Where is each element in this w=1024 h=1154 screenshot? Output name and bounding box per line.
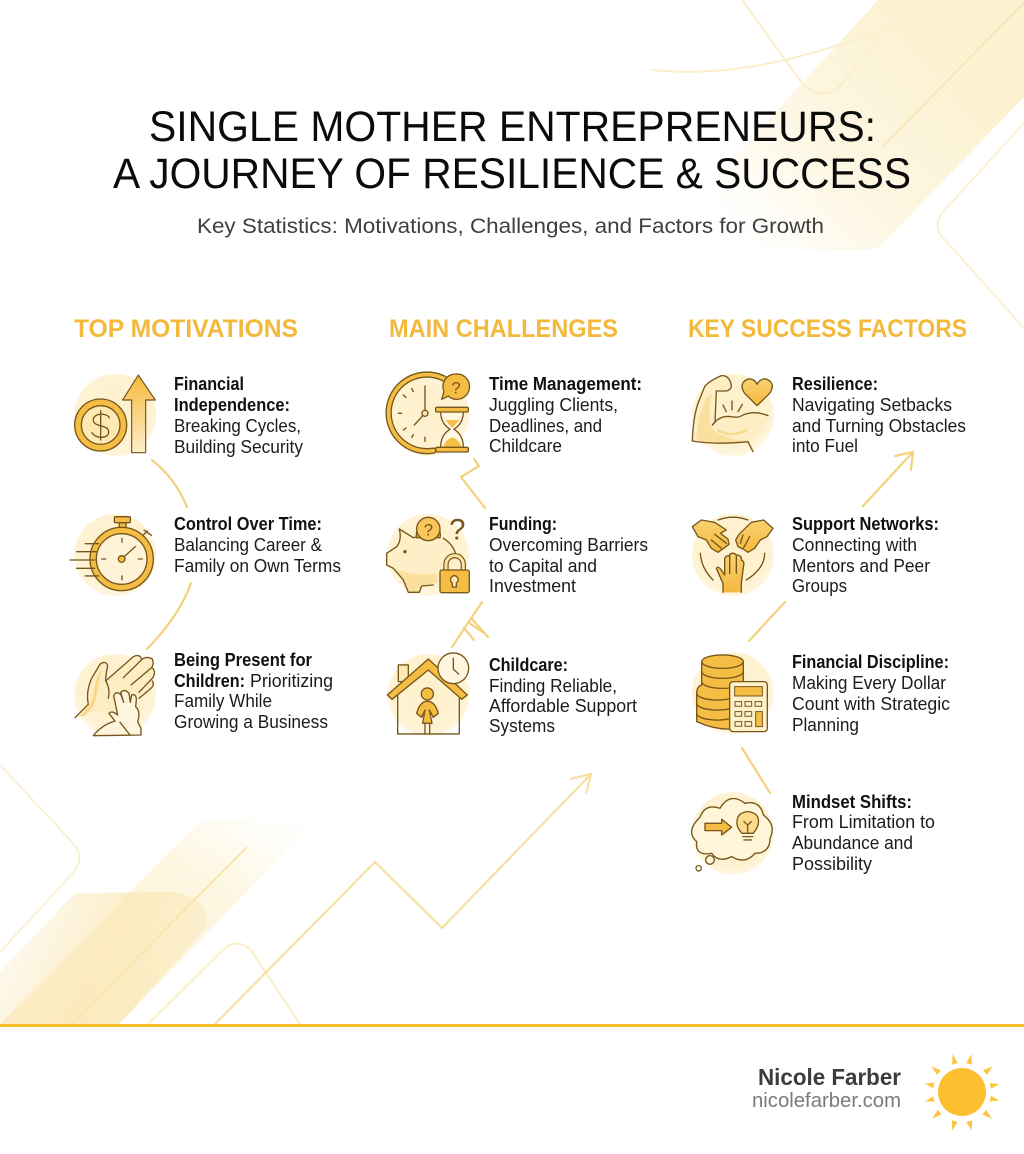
- icon: piggy bank with lock: [387, 514, 469, 596]
- text: financial discipline: [792, 652, 950, 735]
- title: [113, 103, 911, 198]
- connector: challenge 1 to 2: [461, 459, 485, 508]
- heading: key success factors: KEY SUCCESS FACTORS: [688, 315, 967, 343]
- text: mindset shifts: Abundance and: [792, 833, 913, 853]
- icon: three supporting hands: [692, 514, 774, 596]
- text: mindset shifts: Mindset Shifts:: [792, 792, 912, 812]
- text: time management: Juggling Clients,: [489, 395, 618, 415]
- icon: thought cloud with arrow and bulb: [692, 792, 774, 874]
- text: support networks: Groups: [792, 576, 847, 596]
- text: time management: Deadlines, and: [489, 416, 602, 436]
- item: being present for children: [74, 650, 333, 739]
- text: being present for children: Family While: [174, 691, 272, 711]
- item: financial independence: [74, 374, 303, 457]
- text: time management: Time Management:: [489, 374, 642, 394]
- item: childcare: [387, 653, 637, 736]
- icon: sun logo: [924, 1053, 1000, 1132]
- text: being present for children: Being Present for: [174, 650, 312, 670]
- title: A JOURNEY OF RESILIENCE & SUCCESS: [113, 150, 911, 198]
- item: time management: [387, 374, 642, 456]
- connector: success 3 to 4: [742, 748, 770, 793]
- text: being present for children: [174, 650, 333, 732]
- text: mindset shifts: Possibility: [792, 854, 872, 874]
- text: control over time: Balancing Career &: [174, 535, 322, 555]
- footer rule: [0, 1024, 1024, 1027]
- text: financial independence: Building Security: [174, 437, 303, 457]
- text: resilience: [792, 374, 966, 456]
- text: childcare: Finding Reliable,: [489, 676, 617, 696]
- item: financial discipline: [692, 652, 950, 735]
- text: childcare: Systems: [489, 716, 555, 736]
- arrow: towards resilience: [863, 452, 913, 506]
- icon: flexed arm and heart: [692, 374, 774, 456]
- text: funding: Investment: [489, 576, 576, 596]
- text: financial independence: Financial: [174, 374, 244, 394]
- icon: adult and child hands: [74, 654, 156, 739]
- icon: piggy bank with lock: ?: [424, 521, 433, 540]
- text: mindset shifts: From Limitation to: [792, 812, 935, 832]
- text: childcare: Childcare:: [489, 655, 568, 675]
- text: financial independence: [174, 374, 303, 457]
- text: time management: [489, 374, 642, 456]
- text: financial independence: Breaking Cycles,: [174, 416, 301, 436]
- text: support networks: [792, 514, 939, 596]
- heading: top motivations: TOP MOTIVATIONS: [74, 315, 298, 343]
- icon: clock, hourglass and question bubble: [387, 374, 470, 456]
- background decoration: top right: [650, 0, 1024, 328]
- footer: [0, 1027, 1024, 1154]
- item: support networks: [692, 514, 939, 596]
- item: control over time: [70, 514, 341, 596]
- text: support networks: Mentors and Peer: [792, 556, 930, 576]
- item: resilience: [692, 374, 966, 456]
- text: mindset shifts: [792, 792, 935, 874]
- brand url: nicolefarber.com: [752, 1090, 901, 1112]
- text: support networks: Connecting with: [792, 535, 917, 555]
- title: SINGLE MOTHER ENTREPRENEURS:: [149, 103, 876, 151]
- text: funding: to Capital and: [489, 556, 597, 576]
- text: financial discipline: Making Every Dollar: [792, 673, 946, 693]
- icon: piggy bank with lock: ?: [449, 514, 465, 547]
- text: financial discipline: Count with Strategic: [792, 694, 950, 714]
- text: being present for children: Prioritizing: [250, 671, 333, 691]
- text: financial discipline: Financial Discipline:: [792, 652, 949, 672]
- item: funding: [387, 514, 648, 596]
- text: childcare: Affordable Support: [489, 696, 637, 716]
- icon: house with child and clock: [387, 653, 469, 736]
- text: funding: [489, 514, 648, 596]
- brand name: Nicole Farber: [758, 1064, 901, 1090]
- text: control over time: [174, 514, 341, 576]
- text: financial independence: Independence:: [174, 395, 290, 415]
- icon: coin and rising arrow: [74, 374, 156, 456]
- connector: motivation 2 to 3: [147, 583, 191, 649]
- connector: success 2 to 3: [749, 602, 785, 641]
- text: resilience: Navigating Setbacks: [792, 395, 952, 415]
- subtitle: Key Statistics: Motivations, Challenges, and Factors for Growth: [197, 215, 824, 238]
- icon: clock, hourglass and question bubble: ?: [451, 378, 461, 397]
- connector: challenge 2 to 3: [452, 602, 488, 647]
- text: resilience: and Turning Obstacles: [792, 416, 966, 436]
- text: support networks: Support Networks:: [792, 514, 939, 534]
- text: funding: Funding:: [489, 514, 557, 534]
- text: financial discipline: Planning: [792, 715, 859, 735]
- text: control over time: Family on Own Terms: [174, 556, 341, 576]
- text: resilience: Resilience:: [792, 374, 878, 394]
- text: being present for children: Growing a Business: [174, 712, 328, 732]
- text: control over time: Control Over Time:: [174, 514, 322, 534]
- connector: motivation 1 to 2: [152, 460, 187, 507]
- text: being present for children: Children:: [174, 671, 245, 691]
- panel: top motivations: [70, 315, 341, 739]
- text: childcare: [489, 655, 637, 736]
- text: time management: Childcare: [489, 436, 562, 456]
- background decoration: bottom left with rising trend arrow: [0, 765, 591, 1024]
- panel: main challenges: [387, 315, 648, 736]
- text: resilience: into Fuel: [792, 436, 858, 456]
- icon: coin stack and calculator: [692, 652, 774, 734]
- heading: main challenges: MAIN CHALLENGES: [389, 315, 618, 343]
- panel: key success factors: [688, 315, 967, 874]
- text: funding: Overcoming Barriers: [489, 535, 648, 555]
- item: mindset shifts: [692, 792, 935, 874]
- icon: stopwatch: [70, 514, 156, 596]
